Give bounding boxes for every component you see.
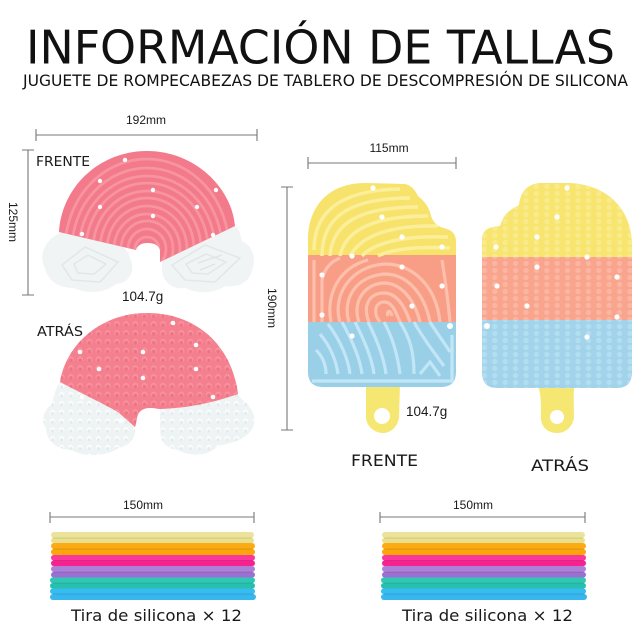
cloud left front — [42, 231, 132, 292]
popsicle bands front — [308, 183, 456, 387]
dimension: strips 150mm left: 150mm — [123, 498, 163, 512]
pink arch front — [59, 151, 235, 262]
weight popsicle: 104.7g — [406, 404, 447, 419]
dimension: rainbow width 192mm: 192mm — [126, 113, 166, 127]
label: FRENTE popsicle: FRENTE — [351, 451, 418, 470]
dimension: strips 150mm left — [50, 498, 254, 523]
dimension: strips 150mm right — [380, 498, 585, 523]
dimension: popsicle width 115mm: 115mm — [369, 141, 409, 155]
dimension: strips 150mm right: 150mm — [453, 498, 493, 512]
label: FRENTE rainbow: FRENTE — [36, 155, 90, 170]
pin holes front — [319, 185, 453, 339]
stick front — [366, 384, 400, 433]
dimension: rainbow width 192mm — [36, 113, 257, 141]
dimension: popsicle height 190mm — [265, 187, 293, 430]
pin holes back — [484, 185, 620, 340]
dimension: popsicle width 115mm — [308, 141, 456, 169]
popsicle bands back — [478, 180, 636, 390]
cloud left back — [43, 382, 135, 455]
silicone strips right — [381, 532, 587, 600]
cloud right front — [162, 226, 254, 292]
stick back — [537, 384, 575, 433]
popsicle back — [478, 180, 636, 433]
popsicle front — [300, 180, 460, 433]
rainbow front — [42, 151, 254, 292]
dimension: popsicle height 190mm: 190mm — [265, 288, 279, 328]
silicone strips left — [50, 532, 256, 600]
dimension: rainbow height 125mm — [6, 150, 34, 295]
subtitle: JUGUETE DE ROMPECABEZAS DE TABLERO DE DESCOMPRESIÓN DE SILICONA — [22, 71, 628, 90]
caption strips left: Tira de silicona × 12 — [70, 606, 242, 625]
label: ATRÁS popsicle: ATRÁS — [531, 456, 589, 475]
title: INFORMACIÓN DE TALLAS — [26, 20, 615, 74]
cloud right back — [160, 394, 254, 455]
pink arch back — [60, 313, 238, 427]
label: ATRÁS rainbow: ATRÁS — [37, 324, 83, 340]
weight rainbow: 104.7g — [122, 289, 163, 304]
rainbow back — [43, 313, 254, 455]
caption strips right: Tira de silicona × 12 — [401, 606, 573, 625]
dimension: rainbow height 125mm: 125mm — [6, 202, 20, 242]
